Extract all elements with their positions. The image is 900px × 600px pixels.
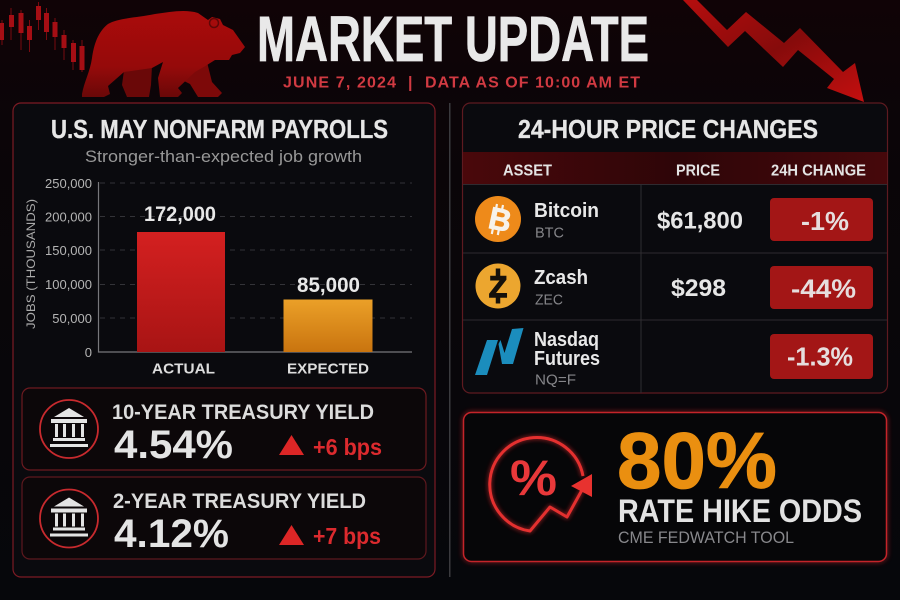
rate hike label: RATE HIKE ODDS [618,493,862,529]
icon: bank [40,490,98,548]
table header: PRICE [676,162,720,180]
icon: bank [40,400,98,458]
candlestick decoration [0,2,84,72]
big number: 80% [617,416,777,505]
icon: nasdaq [475,328,524,375]
date subtitle: DATA AS OF 10:00 AM ET [425,74,640,92]
arrow: falling market [683,0,864,102]
y axis title: JOBS (THOUSANDS) [24,199,38,329]
card label: 2-YEAR TREASURY YIELD [113,490,366,513]
row: zcash: Zcash [534,267,588,289]
triangle up [279,435,304,455]
panel heading: U.S. MAY NONFARM PAYROLLS [51,114,388,144]
bar chart [24,176,412,378]
bar: expected [284,300,372,352]
date subtitle: | [408,74,412,92]
panel subtitle: Stronger-than-expected job growth [85,147,362,166]
y axis labels: 250,000 [45,176,92,191]
row: nasdaq futures [475,328,873,388]
row: bitcoin [475,196,873,242]
row: zcash: ZEC [535,292,563,308]
triangle up [279,525,304,545]
yield value: 4.12% [114,512,229,556]
y axis labels [45,176,92,360]
row: bitcoin: $61,800 [657,208,743,234]
row: zcash: -44% [791,274,856,304]
row: nasdaq futures: NQ=F [535,372,576,388]
icon: zcash [476,264,520,308]
row: bitcoin: BTC [535,224,564,242]
row: zcash [476,264,873,309]
table header: ASSET [503,162,552,180]
row: bitcoin: -1% [801,206,849,236]
divider [449,103,450,577]
row: nasdaq futures: Futures [534,348,600,370]
panel: price changes [462,103,888,393]
y axis labels: 150,000 [45,243,92,258]
date subtitle [283,74,640,92]
panel: nonfarm payrolls [13,103,435,577]
date subtitle: JUNE 7, 2024 [283,74,396,92]
y axis labels: 0 [85,345,92,360]
row: nasdaq futures: Nasdaq [534,329,599,351]
label: actual: ACTUAL [152,360,215,378]
value: actual: 172,000 [144,203,216,226]
icon: bitcoin: B [486,200,515,239]
icon: zcash: Z [489,271,507,304]
icon: percent with rising arrow [490,437,592,531]
title: MARKET UPDATE [257,3,649,75]
row: zcash: $298 [671,275,726,302]
icon: bitcoin [475,196,521,242]
card label: 10-YEAR TREASURY YIELD [112,401,374,424]
bar: actual [137,232,225,352]
y axis labels: 50,000 [52,311,92,326]
card: 2-year treasury [22,477,426,559]
yield value: 4.54% [114,423,233,467]
row: nasdaq futures: -1.3% [787,342,853,372]
table header [463,152,887,184]
icon: percent with rising arrow: % [510,450,557,506]
y axis labels: 100,000 [45,277,92,292]
card: 10-year treasury [22,388,426,470]
panel heading: 24-HOUR PRICE CHANGES [518,114,818,144]
y axis labels: 200,000 [45,210,92,224]
value: expected: 85,000 [297,274,360,297]
change: +6 bps [313,434,382,460]
panel: rate hike odds [464,412,886,562]
table header: 24H CHANGE [771,162,866,180]
source: CME FEDWATCH TOOL [618,528,794,547]
row: bitcoin: Bitcoin [534,200,599,222]
icon: red bear [82,11,245,97]
change: +7 bps [313,523,381,549]
label: expected: EXPECTED [287,360,369,378]
